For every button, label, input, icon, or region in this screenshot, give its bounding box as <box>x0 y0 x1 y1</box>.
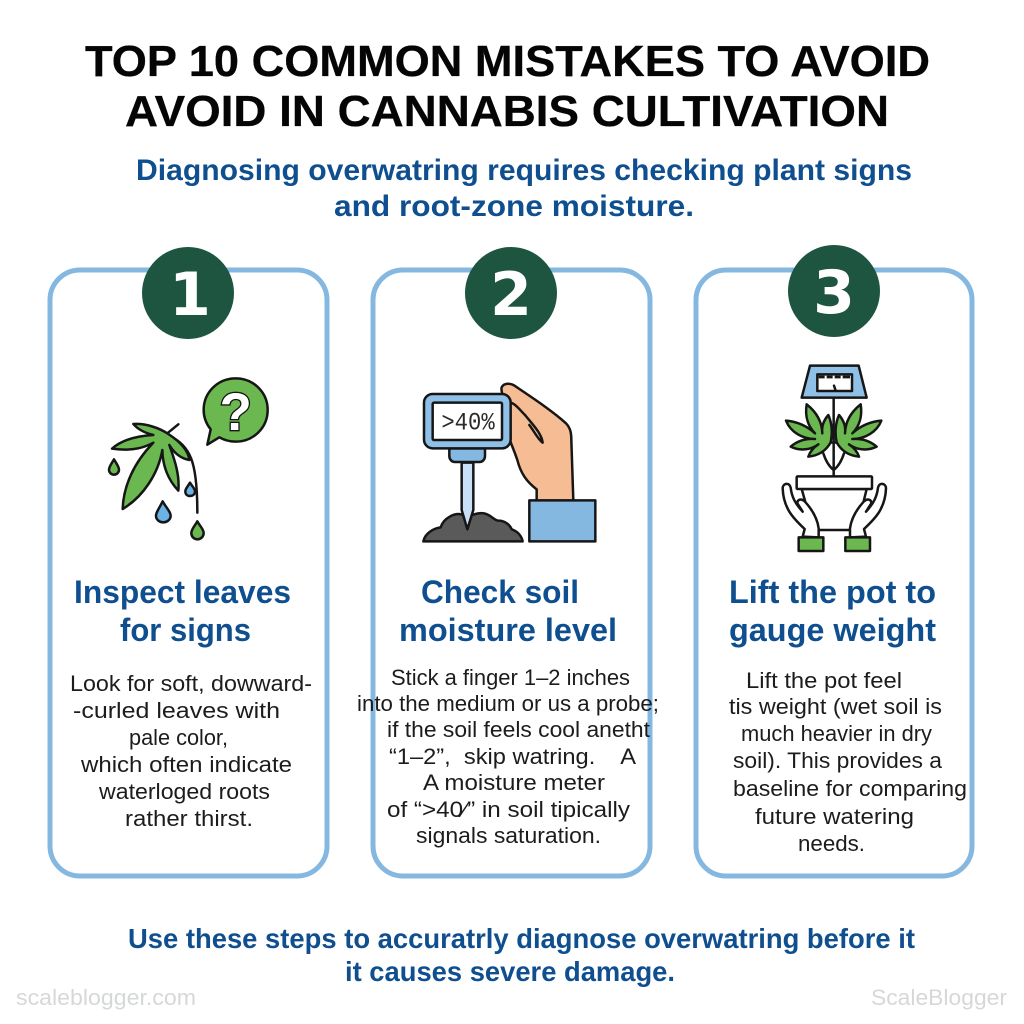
panel: step 2 check soil moisture <box>357 247 659 876</box>
title: TOP 10 COMMON MISTAKES TO AVOID <box>85 38 930 86</box>
number badge 3 <box>788 245 880 337</box>
body text 2: Stick a finger 1–2 inches <box>391 665 630 690</box>
number badge 3: 3 <box>813 258 855 328</box>
icon: moisture meter and hand: >40% <box>441 408 495 437</box>
icon: hands lifting potted plant under a scale <box>783 366 886 551</box>
panel: step 3 lift the pot <box>696 245 972 876</box>
card frame 2 <box>373 270 650 876</box>
subtitle: and root-zone moisture. <box>334 190 694 223</box>
card frame 1 <box>50 270 327 876</box>
footer message: Use these steps to accuratrly diagnose overwatring before it <box>128 923 915 954</box>
card frame 3 <box>696 270 972 876</box>
heading 2: moisture level <box>399 612 617 648</box>
title <box>85 38 930 136</box>
body text 2: into the medium or us a probe; <box>357 691 659 716</box>
footer message: it causes severe damage. <box>345 956 675 987</box>
body text 3: much heavier in dry <box>741 721 932 746</box>
watermark left: scaleblogger.com <box>16 985 196 1010</box>
body text 3: baseline for comparing <box>733 776 967 801</box>
number badge 1: 1 <box>169 260 211 330</box>
body text 2 <box>357 665 659 848</box>
watermark right: ScaleBlogger <box>871 985 1007 1010</box>
heading 1: for signs <box>120 612 251 648</box>
body text 2: A moisture meter <box>423 770 605 795</box>
heading 2 <box>399 574 617 648</box>
body text 3 <box>729 668 967 856</box>
heading 3: gauge weight <box>729 612 936 648</box>
heading 1 <box>74 574 291 648</box>
footer message <box>128 923 915 987</box>
body text 3: Lift the pot feel <box>746 668 902 693</box>
number badge 1 <box>142 247 234 339</box>
subtitle <box>136 154 912 223</box>
heading 2: Check soil <box>421 574 579 610</box>
body text 3: needs. <box>798 831 865 856</box>
body text 3: tis weight (wet soil is <box>729 694 942 719</box>
body text 2: signals saturation. <box>416 823 601 848</box>
body text 1: waterloged roots <box>98 779 270 804</box>
title: AVOID IN CANNABIS CULTIVATION <box>125 88 889 136</box>
body text 1: rather thirst. <box>125 806 253 831</box>
body text 2: if the soil feels cool anetht <box>387 717 650 742</box>
heading 1: Inspect leaves <box>74 574 291 610</box>
body text 2: “1–2”, skip watring. A <box>389 744 636 769</box>
body text 1: -curled leaves with <box>73 698 280 723</box>
body text 3: future watering <box>755 804 914 829</box>
subtitle: Diagnosing overwatring requires checking plant signs <box>136 154 912 187</box>
panel: step 1 inspect leaves <box>50 247 327 876</box>
body text 1: Look for soft, dowward- <box>70 671 312 696</box>
number badge 2 <box>465 247 557 339</box>
heading 3: Lift the pot to <box>729 574 936 610</box>
icon: drooping leaf with question bubble and drops <box>109 378 268 539</box>
body text 1: which often indicate <box>80 752 292 777</box>
icon: moisture meter and hand <box>423 384 595 541</box>
heading 3 <box>729 574 936 648</box>
body text 1 <box>70 671 312 831</box>
icon: drooping leaf with question bubble and drops: ? <box>220 383 252 442</box>
number badge 2: 2 <box>490 260 532 330</box>
body text 3: soil). This provides a <box>733 748 943 773</box>
body text 1: pale color, <box>129 725 228 750</box>
body text 2: of “>40⁄” in soil tipically <box>387 797 630 822</box>
